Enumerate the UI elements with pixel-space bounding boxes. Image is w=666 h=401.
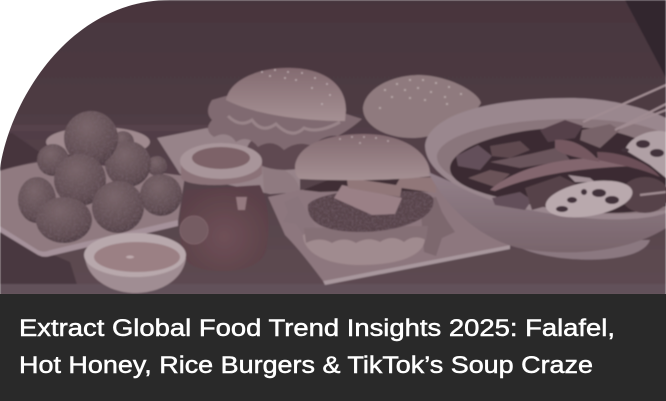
title text: Extract Global Food Trend Insights 2025: Falafel, bbox=[19, 315, 615, 342]
sesame bun at back bbox=[363, 75, 481, 138]
title band bbox=[0, 294, 666, 401]
soup ingredients bbox=[456, 120, 666, 213]
title text: Hot Honey, Rice Burgers & TikTok’s Soup Craze bbox=[19, 352, 593, 379]
front burger bbox=[283, 134, 455, 265]
honey jar bbox=[179, 143, 264, 262]
dip bowl bbox=[84, 233, 186, 293]
left plate and back bowl bbox=[0, 127, 185, 257]
background wall and wood table bbox=[0, 0, 666, 295]
soup broth bbox=[450, 127, 666, 213]
back burger plate bbox=[157, 128, 300, 194]
photo: food spread with duotone tint and curved corner bbox=[0, 0, 666, 295]
lotus slices bbox=[543, 131, 666, 223]
falafel pile bbox=[18, 111, 182, 243]
front burger plate bbox=[268, 178, 510, 281]
soup bowl bbox=[425, 85, 666, 260]
back burger bbox=[208, 68, 362, 193]
skewers bbox=[583, 85, 666, 195]
